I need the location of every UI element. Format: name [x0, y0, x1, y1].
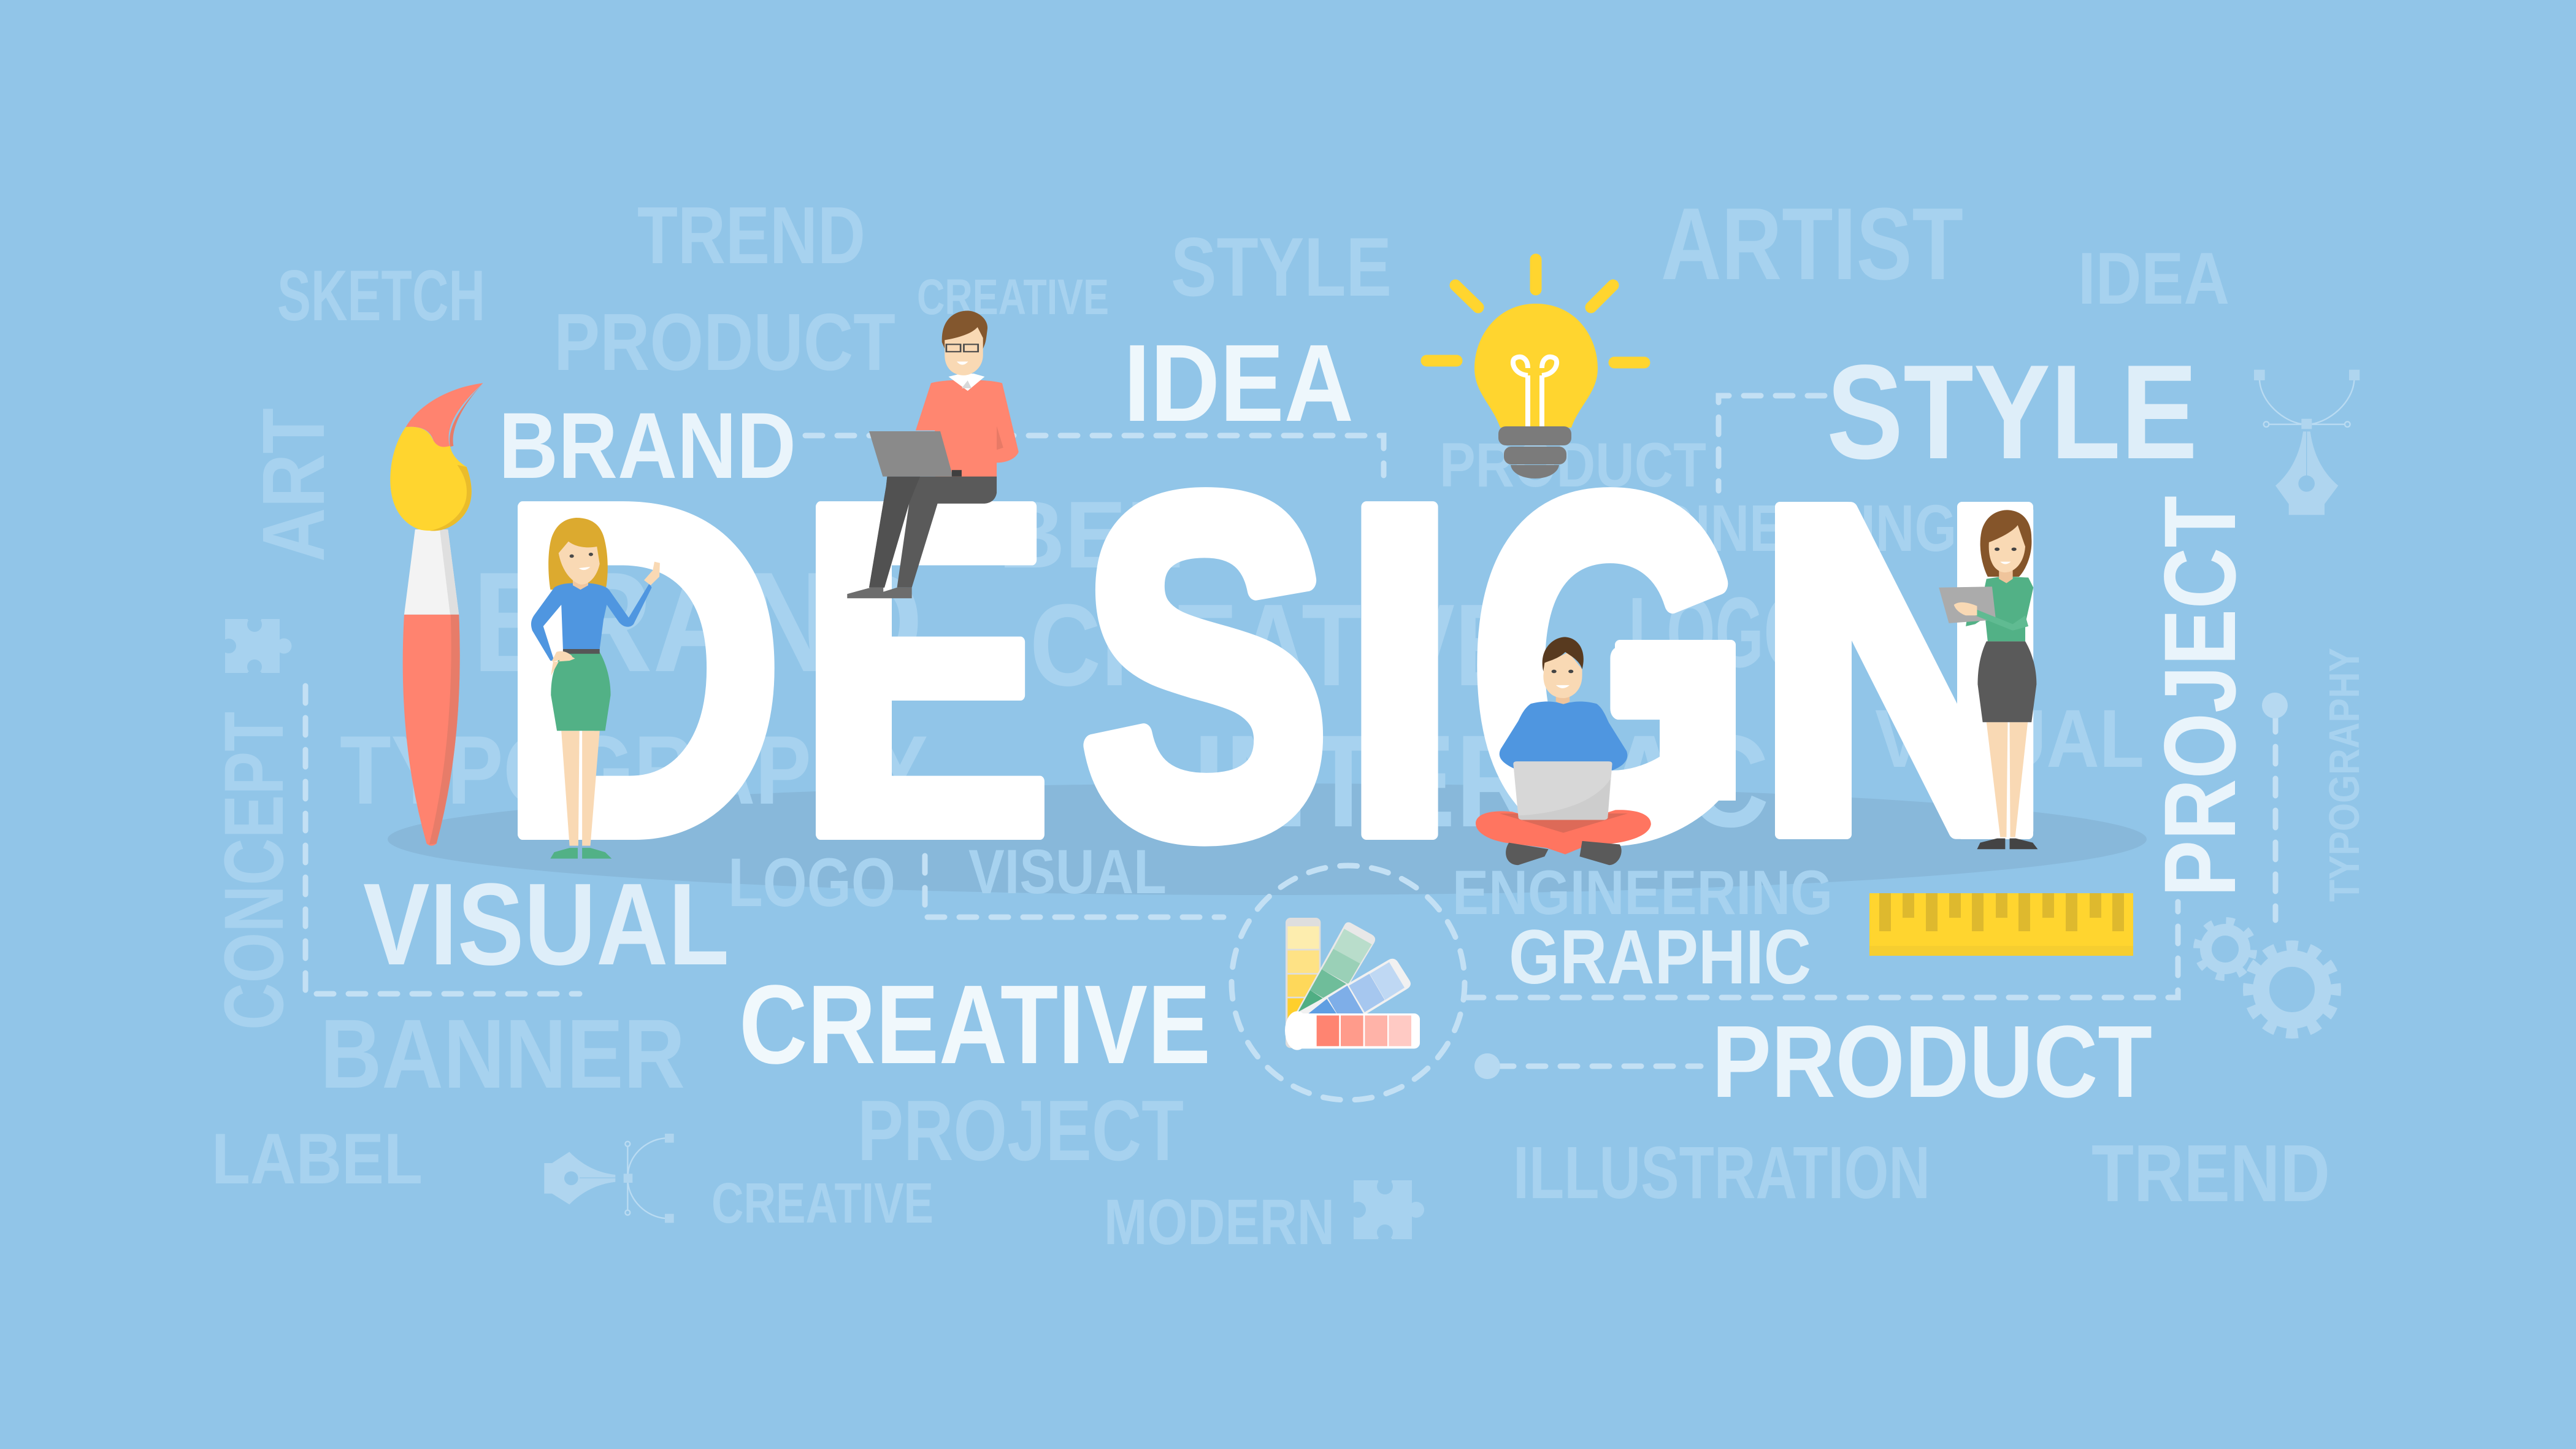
icon: ruler	[1869, 893, 2133, 956]
keyword: PROJECT vertical: PROJECT	[2144, 496, 2257, 897]
letter N: N	[1755, 410, 2054, 930]
word: CREATIVE top: CREATIVE	[917, 269, 1109, 325]
background word cloud	[207, 187, 2368, 1258]
big gear	[2248, 946, 2336, 1033]
letter S: S	[1081, 401, 1329, 932]
word: CONCEPT vertical: CONCEPT	[207, 712, 301, 1030]
icon: pen tool upper right	[2254, 370, 2359, 515]
figure: man with laptop sitting on E	[847, 311, 1019, 598]
word: PRODUCT under bulb: PRODUCT	[1439, 430, 1706, 500]
icon: pen tool bottom left	[544, 1134, 674, 1223]
figure: woman in blue top	[531, 518, 660, 859]
word: TYPOGRAPHY vertical: TYPOGRAPHY	[2320, 648, 2368, 902]
keyword: PRODUCT: PRODUCT	[1712, 1005, 2152, 1119]
small gear	[2193, 917, 2258, 982]
word: BE partial: BEL	[999, 482, 1183, 588]
main keywords	[363, 321, 2257, 1119]
word: TYPOGRAPHY: TYPOGRAPHY	[340, 715, 928, 824]
word: ENGINEERING bottom: ENGINEERING	[1452, 858, 1833, 928]
keyword: CREATIVE: CREATIVE	[739, 961, 1211, 1087]
word: IDEA: IDEA	[2078, 237, 2229, 320]
word: LOGO behind N: LOGO	[1628, 576, 1812, 688]
letter E: E	[794, 404, 1055, 936]
keyword: GRAPHIC: GRAPHIC	[1509, 915, 1811, 1000]
icon: paint brush	[390, 383, 483, 846]
pin: product line end	[1474, 1053, 1500, 1079]
icon: light bulb	[1427, 259, 1644, 479]
ground shadow ellipse	[388, 783, 2147, 895]
dashed connector lines	[305, 396, 2275, 1100]
word: TREND: TREND	[637, 190, 865, 280]
word: TREND right: TREND	[2091, 1128, 2330, 1218]
word: MODERN: MODERN	[1104, 1186, 1335, 1258]
icon: puzzle piece left	[221, 617, 292, 674]
figure: man sitting cross-legged with laptop	[1476, 637, 1651, 865]
word: VISUAL bottom: VISUAL	[968, 837, 1167, 907]
pin: vertical line end	[2262, 693, 2288, 718]
bulb filament	[1513, 357, 1557, 426]
word: CREATIVE large: CREATIVE	[1030, 580, 1520, 710]
letter D: D	[496, 404, 787, 936]
word: BANNER: BANNER	[320, 999, 685, 1109]
word: PROJECT bottom: PROJECT	[857, 1082, 1184, 1178]
word: ILLUSTRATION: ILLUSTRATION	[1513, 1131, 1930, 1214]
letter G: G	[1471, 400, 1747, 932]
keyword: STYLE: STYLE	[1827, 337, 2198, 487]
bulb rays	[1427, 259, 1644, 363]
keyword: IDEA: IDEA	[1124, 321, 1354, 444]
word: LOGO bottom: LOGO	[728, 844, 895, 921]
word: INTERFACE: INTERFACE	[1193, 708, 1846, 855]
word: SKETCH: SKETCH	[277, 255, 485, 336]
keyword: BRAND: BRAND	[499, 393, 796, 498]
figure: woman with tablet	[1939, 510, 2037, 849]
word: CREATIVE bottom: CREATIVE	[711, 1171, 933, 1235]
keyword: VISUAL: VISUAL	[363, 859, 729, 990]
bulb base	[1498, 426, 1571, 445]
word: VISUAL right: VISUAL	[1875, 693, 2144, 785]
word: PRODUCT left: PRODUCT	[554, 297, 895, 387]
word: ART vertical: ART	[244, 408, 343, 562]
icon: colour palette fan	[1285, 918, 1420, 1050]
word: LABEL: LABEL	[212, 1118, 423, 1199]
word: ARTIST: ARTIST	[1661, 187, 1963, 301]
headline letters DESIGN	[496, 400, 2054, 936]
word: STYLE: STYLE	[1171, 220, 1392, 313]
icon: gears	[2193, 917, 2336, 1033]
bulb glass	[1474, 304, 1598, 428]
word: ENGINEERING behind N: ENGINEERING	[1578, 491, 1957, 565]
icon: puzzle piece bottom	[1350, 1178, 1424, 1240]
letter I: I	[1336, 404, 1463, 936]
word: BRAND large: BRAND	[472, 543, 923, 702]
